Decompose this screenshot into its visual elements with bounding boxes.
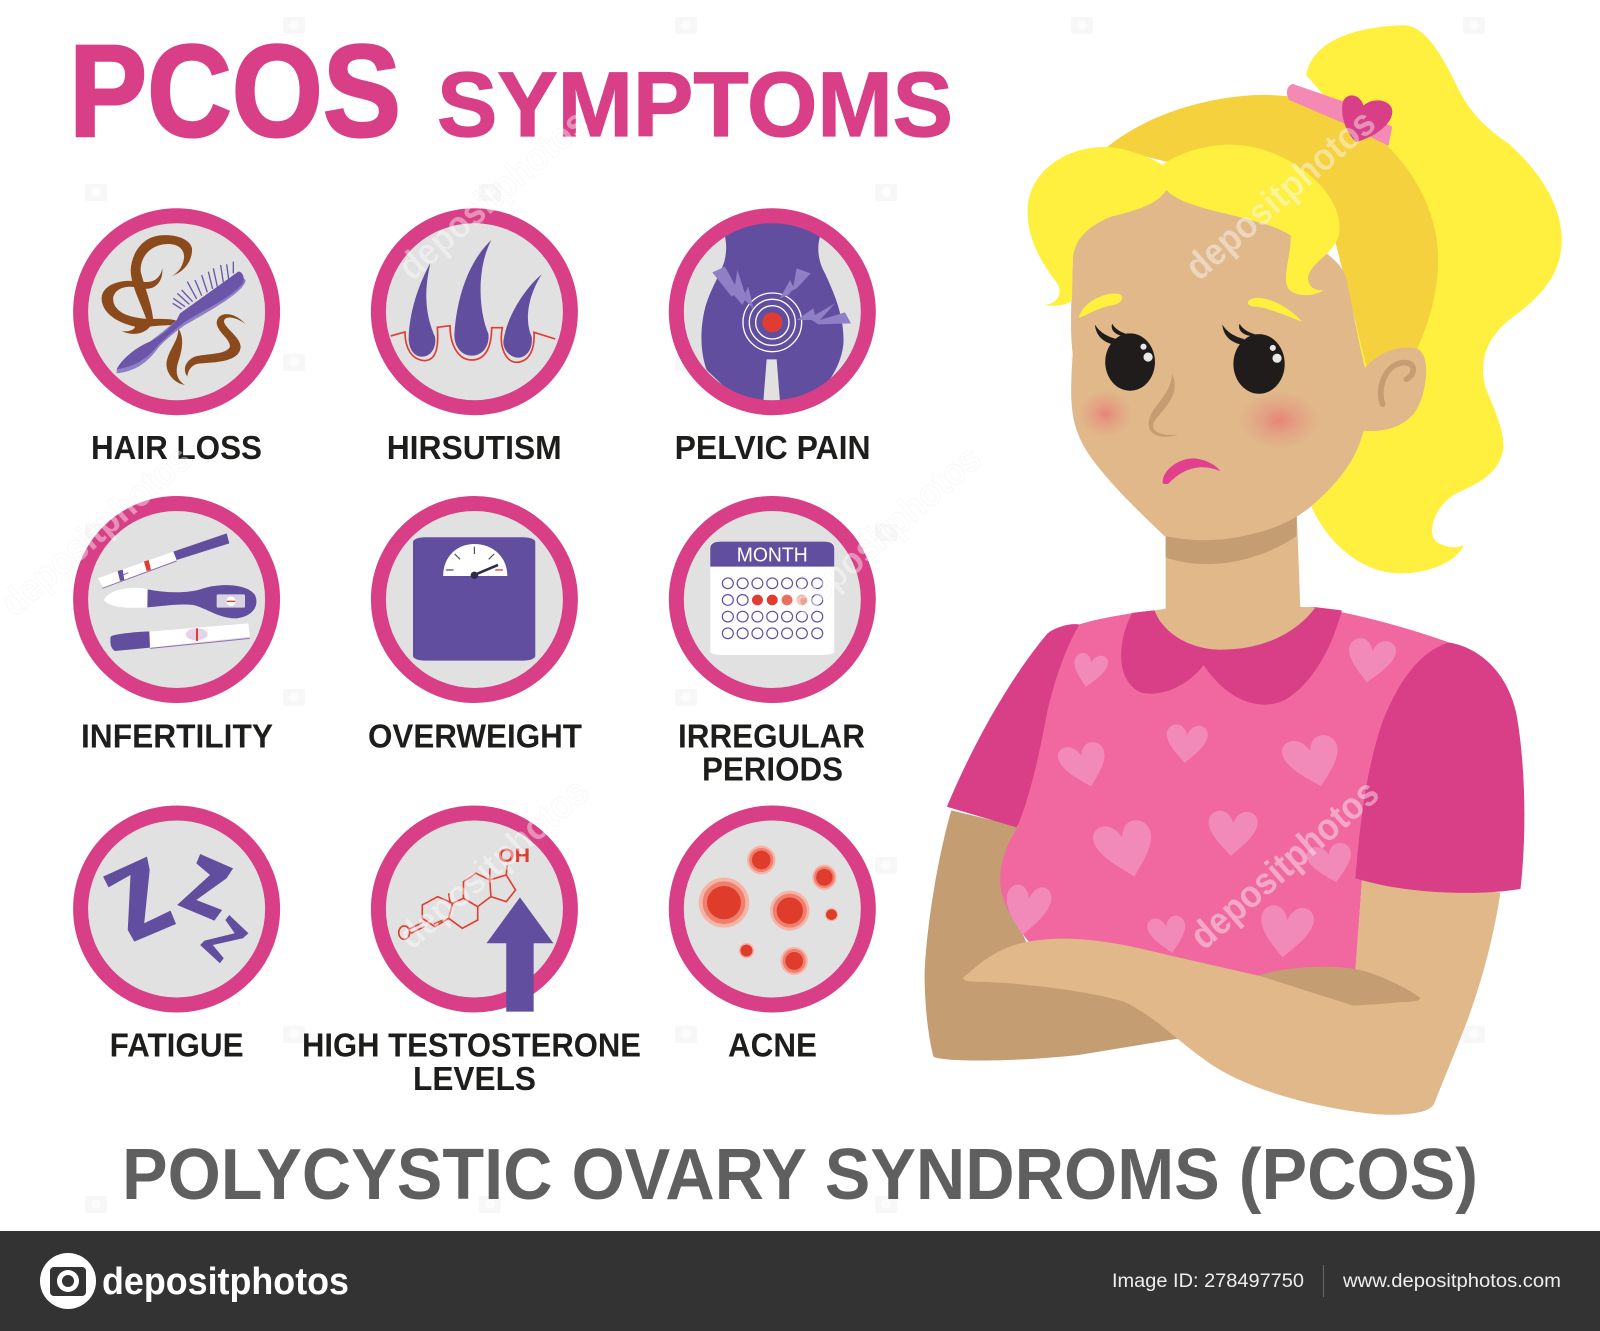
subtitle: POLYCYSTIC OVARY SYNDROMS (PCOS) (122, 1135, 1478, 1215)
symptom labels: OVERWEIGHT (368, 718, 582, 755)
symptom labels: PERIODS (702, 751, 843, 788)
symptom labels (81, 429, 871, 1097)
watermark text: depositphotos (783, 438, 990, 625)
footer url: www.depositphotos.com (1342, 1270, 1561, 1292)
watermark text: depositphotos (1177, 102, 1384, 289)
girl head and hair (1028, 25, 1562, 610)
symptom labels: HIRSUTISM (387, 429, 562, 466)
symptom labels: ACNE (728, 1027, 817, 1064)
symptom labels: PELVIC PAIN (675, 429, 871, 466)
panel: high testosterone (378, 813, 570, 1012)
footer logo (40, 1253, 349, 1309)
symptom labels: HAIR LOSS (91, 429, 262, 466)
footer logo: depositphotos (102, 1261, 349, 1303)
panel: irregular periods (676, 504, 868, 696)
watermark text (0, 102, 1387, 958)
panel: hair loss (81, 216, 273, 408)
footer bar (0, 1231, 1600, 1331)
panel: hirsutism (378, 216, 570, 408)
icon: bathroom scale (413, 537, 535, 661)
icon: testosterone molecule (399, 846, 530, 939)
icon: pelvis (701, 222, 851, 402)
panel: infertility (81, 504, 273, 696)
title: SYMPTOMS (437, 54, 953, 156)
watermark text: depositphotos (390, 771, 597, 958)
icon: test strips (98, 533, 256, 651)
illustration: girl (925, 25, 1562, 1115)
panel: overweight (378, 504, 570, 696)
symptom labels: HIGH TESTOSTERONE (302, 1027, 641, 1064)
title (69, 17, 953, 164)
panel: fatigue (81, 813, 273, 1005)
icon: hair follicles (391, 240, 555, 362)
symptom labels: LEVELS (413, 1060, 536, 1097)
icon: testosterone molecule: OH (498, 846, 530, 867)
icon: calendar (710, 542, 834, 655)
footer image id: Image ID: 278497750 (1112, 1270, 1304, 1292)
icon: sleep Zs (103, 854, 248, 963)
icon: calendar: MONTH (737, 544, 808, 566)
arrow: upward (486, 897, 553, 1012)
girl body and crossed arms (925, 580, 1524, 1115)
watermark text: depositphotos (390, 102, 597, 289)
title: PCOS (69, 17, 401, 164)
watermark text: depositphotos (0, 438, 200, 625)
watermark camera grid (85, 17, 1485, 1213)
icon: hair and brush (102, 235, 246, 385)
watermark text: depositphotos (1182, 772, 1387, 958)
symptom labels: FATIGUE (110, 1027, 244, 1064)
symptom labels: IRREGULAR (678, 718, 865, 755)
panel: acne (676, 813, 868, 1005)
panel: pelvic pain (676, 216, 868, 408)
icon: acne spots (699, 846, 838, 975)
symptom labels: INFERTILITY (81, 718, 273, 755)
